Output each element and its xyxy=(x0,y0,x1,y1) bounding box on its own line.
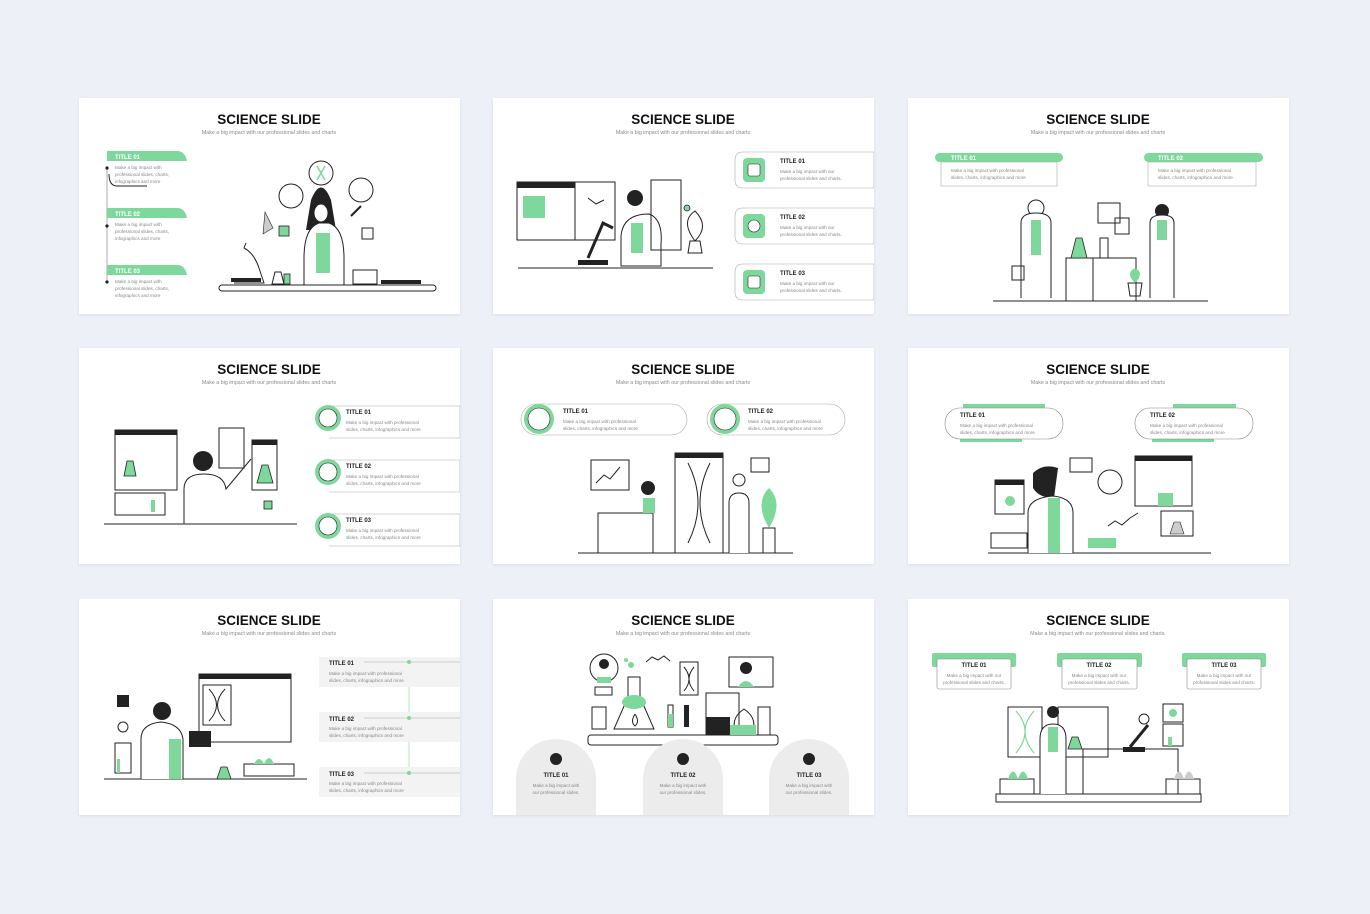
box 3: Make a big impact with our xyxy=(1197,673,1252,678)
box 2 xyxy=(1135,404,1253,442)
box 1: TITLE 01 xyxy=(961,663,987,669)
list items: professional slides and charts. xyxy=(780,176,842,181)
title: SCIENCE SLIDE xyxy=(217,362,321,377)
list items: professional slides and charts. xyxy=(780,232,842,237)
list items: Make a big impact with professional xyxy=(346,474,419,479)
timeline list xyxy=(105,151,187,298)
title xyxy=(1031,362,1165,386)
box 1: Make a big impact with professional xyxy=(960,423,1033,428)
timeline list: Make a big impact with xyxy=(115,279,162,284)
illustration: presenter with screens xyxy=(104,428,297,524)
title xyxy=(202,112,336,136)
title xyxy=(616,112,750,136)
illustration: DNA presenter xyxy=(104,674,307,779)
box 2: professional slides and charts. xyxy=(1068,680,1130,685)
illustration: chemistry lab xyxy=(588,654,778,745)
list items: slides, charts, infographics and more xyxy=(329,733,404,738)
text box 2 xyxy=(1144,153,1263,186)
list items: Make a big impact with professional xyxy=(329,781,402,786)
slide 3 xyxy=(908,98,1289,314)
column 2 xyxy=(643,739,723,815)
text box 1: Make a big impact with professional xyxy=(951,168,1024,173)
pill 2: slides, charts, infographics and more xyxy=(748,426,823,431)
text box 1 xyxy=(935,153,1063,186)
column 3: TITLE 03 xyxy=(796,773,822,779)
title: SCIENCE SLIDE xyxy=(631,112,735,127)
pill 2 xyxy=(707,404,845,435)
box 2 xyxy=(1057,653,1142,689)
list items: TITLE 02 xyxy=(346,464,372,470)
timeline list: TITLE 01 xyxy=(115,155,141,161)
box 1: Make a big impact with our xyxy=(947,673,1002,678)
list items: Make a big impact with professional xyxy=(329,726,402,731)
column 3: Make a big impact with xyxy=(786,783,833,788)
list items: TITLE 02 xyxy=(329,717,355,723)
list items: TITLE 02 xyxy=(780,215,806,221)
list items: TITLE 03 xyxy=(346,518,372,524)
title xyxy=(202,362,336,386)
slide 6 xyxy=(908,348,1289,564)
timeline list: TITLE 02 xyxy=(115,212,141,218)
list items: TITLE 03 xyxy=(329,772,355,778)
title xyxy=(616,613,750,637)
title: Make a big impact with our professional slides and charts xyxy=(202,380,336,386)
timeline list: infographics and more xyxy=(115,179,161,184)
list items xyxy=(315,405,460,546)
timeline list: professional slides, charts, xyxy=(115,229,169,234)
pill 1: TITLE 01 xyxy=(563,409,589,415)
slide 7 xyxy=(79,599,460,815)
column 1: TITLE 01 xyxy=(543,773,569,779)
title: SCIENCE SLIDE xyxy=(1046,112,1150,127)
illustration: DNA lab xyxy=(578,453,793,553)
list items: slides, charts, infographics and more xyxy=(346,481,421,486)
title xyxy=(1030,613,1166,637)
timeline list: infographics and more xyxy=(115,236,161,241)
illustration: lab with microscope xyxy=(517,180,713,268)
list items: Make a big impact with our xyxy=(780,281,835,286)
pill 2: TITLE 02 xyxy=(748,409,774,415)
slide 1 xyxy=(79,98,460,314)
text box 1: slides, charts, infographics and more xyxy=(951,175,1026,180)
list items: Make a big impact with professional xyxy=(346,528,419,533)
column 2: TITLE 02 xyxy=(670,773,696,779)
list items: Make a big impact with professional xyxy=(329,671,402,676)
title: Make a big impact with our professional slides and charts xyxy=(616,130,750,136)
title: Make a big impact with our professional slides and charts xyxy=(616,380,750,386)
illustration: scientist thinking xyxy=(219,161,436,291)
title xyxy=(616,362,750,386)
box 1 xyxy=(945,404,1063,442)
column 3 xyxy=(769,739,849,815)
slide 9 xyxy=(908,599,1289,815)
slide 5 xyxy=(493,348,874,564)
title: SCIENCE SLIDE xyxy=(217,112,321,127)
title xyxy=(1031,112,1165,136)
list items: TITLE 01 xyxy=(329,661,355,667)
slide 8 xyxy=(493,599,874,815)
list items: professional slides and charts. xyxy=(780,288,842,293)
title: Make a big impact with our professional slides and charts xyxy=(616,631,750,637)
timeline list: infographics and more xyxy=(115,293,161,298)
text box 2: slides, charts, infographics and more xyxy=(1158,175,1233,180)
title: Make a big impact with our professional slides and charts xyxy=(202,631,336,637)
box 3: professional slides and charts. xyxy=(1193,680,1255,685)
box 2: TITLE 02 xyxy=(1150,413,1176,419)
text box 2: TITLE 02 xyxy=(1158,156,1184,162)
list items: TITLE 01 xyxy=(780,159,806,165)
pill 1: Make a big impact with professional xyxy=(563,419,636,424)
list items: slides, charts, infographics and more xyxy=(346,427,421,432)
box 1: professional slides and charts. xyxy=(943,680,1005,685)
title: SCIENCE SLIDE xyxy=(217,613,321,628)
illustration: two scientists xyxy=(993,200,1208,301)
column 1: our professional slides. xyxy=(533,790,579,795)
list items xyxy=(735,152,874,300)
slide 4 xyxy=(79,348,460,564)
title xyxy=(202,613,336,637)
column 2: our professional slides. xyxy=(660,790,706,795)
text box 1: TITLE 01 xyxy=(951,156,977,162)
list items: slides, charts, infographics and more xyxy=(346,535,421,540)
list items: slides, charts, infographics and more xyxy=(329,788,404,793)
list items: TITLE 01 xyxy=(346,410,372,416)
title: SCIENCE SLIDE xyxy=(1046,613,1150,628)
timeline list: Make a big impact with xyxy=(115,165,162,170)
illustration: lab bench xyxy=(996,704,1201,802)
box 2: Make a big impact with our xyxy=(1072,673,1127,678)
pill 2: Make a big impact with professional xyxy=(748,419,821,424)
title: Make a big impact with our professional slides and charts xyxy=(1031,130,1165,136)
timeline list: professional slides, charts, xyxy=(115,172,169,177)
box 3 xyxy=(1182,653,1266,689)
list items: slides, charts, infographics and more xyxy=(329,678,404,683)
list items: Make a big impact with our xyxy=(780,169,835,174)
list items xyxy=(319,657,460,797)
title: Make a big impact with our professional slides and charts xyxy=(1031,380,1165,386)
box 2: Make a big impact with professional xyxy=(1150,423,1223,428)
timeline list: Make a big impact with xyxy=(115,222,162,227)
box 2: slides, charts, infographics and more xyxy=(1150,430,1225,435)
box 1 xyxy=(932,653,1016,689)
pill 1: slides, charts, infographics and more xyxy=(563,426,638,431)
title: Make a big impact with our professional slides and charts. xyxy=(1030,631,1166,637)
title: SCIENCE SLIDE xyxy=(1046,362,1150,377)
list items: Make a big impact with our xyxy=(780,225,835,230)
box 1: slides, charts, infographics and more xyxy=(960,430,1035,435)
title: SCIENCE SLIDE xyxy=(631,362,735,377)
box 3: TITLE 03 xyxy=(1211,663,1237,669)
title: Make a big impact with our professional slides and charts xyxy=(202,130,336,136)
slide 2 xyxy=(493,98,874,314)
column 1: Make a big impact with xyxy=(533,783,580,788)
list items: TITLE 03 xyxy=(780,271,806,277)
text box 2: Make a big impact with professional xyxy=(1158,168,1231,173)
list items: Make a big impact with professional xyxy=(346,420,419,425)
timeline list: TITLE 03 xyxy=(115,269,141,275)
column 2: Make a big impact with xyxy=(660,783,707,788)
box 1: TITLE 01 xyxy=(960,413,986,419)
title: SCIENCE SLIDE xyxy=(631,613,735,628)
pill 1 xyxy=(521,404,687,435)
illustration: scientist with screens xyxy=(988,456,1211,553)
column 3: our professional slides. xyxy=(786,790,832,795)
timeline list: professional slides, charts, xyxy=(115,286,169,291)
box 2: TITLE 02 xyxy=(1086,663,1112,669)
column 1 xyxy=(516,739,596,815)
